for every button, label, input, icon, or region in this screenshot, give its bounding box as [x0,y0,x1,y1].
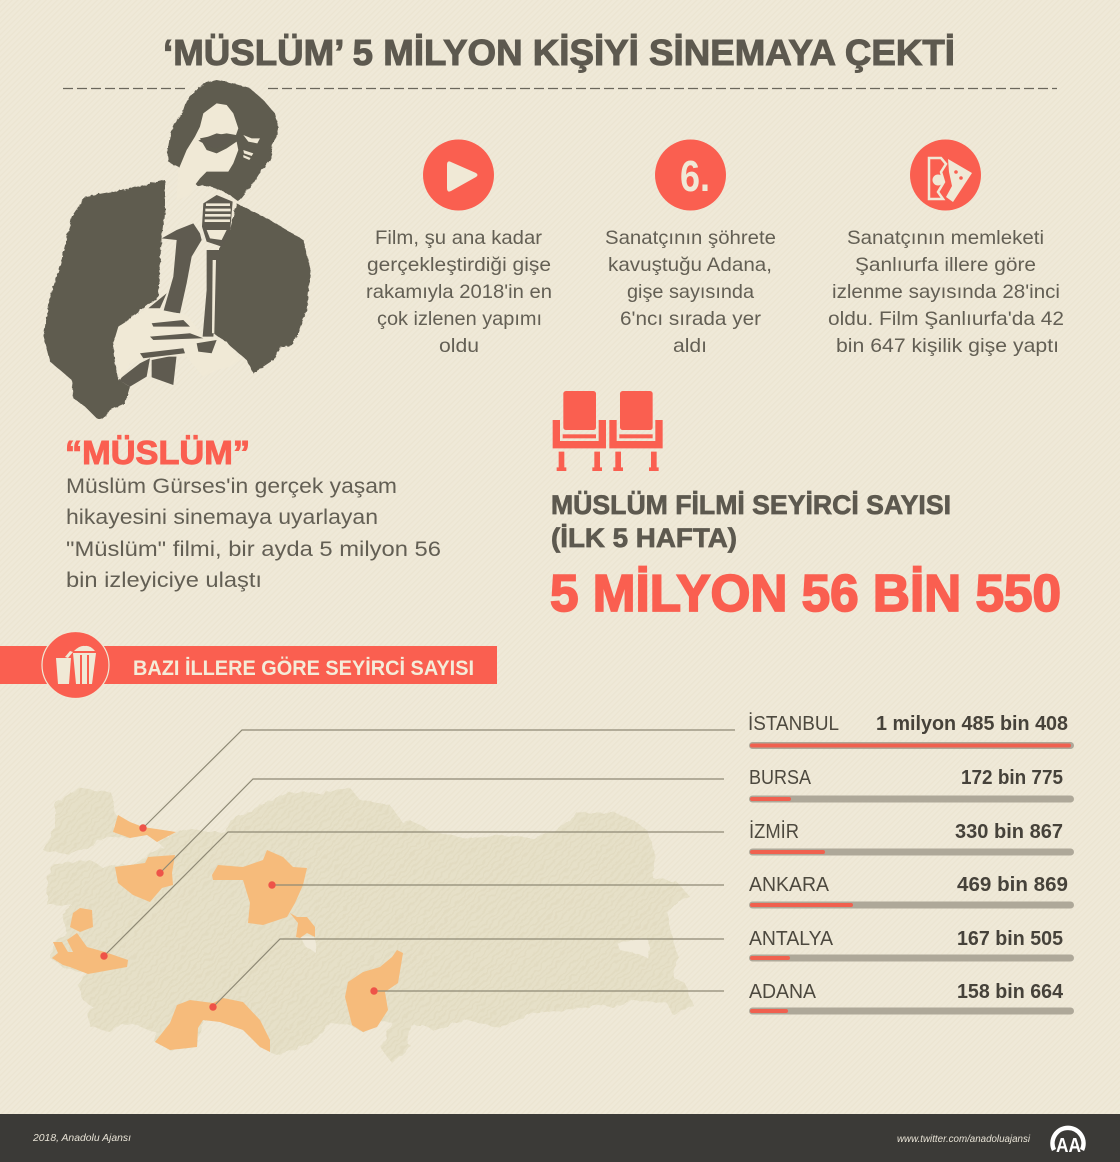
row: Antalya [749,928,1074,962]
province: Ankara [212,850,315,938]
text: most watched film of 2018: oldu [439,335,479,357]
icon: number six [655,140,726,210]
text: most watched film of 2018: Film, şu ana kadar [375,227,543,249]
province: Adana [345,950,403,1032]
text: Şanlıurfa ranks 28th: izlenme sayısında 28'inci [832,281,1060,303]
title: ‘MÜSLÜM’ 5 MİLYON KİŞİYİ SİNEMAYA ÇEKTİ [163,32,955,73]
text: Adana ranks sixth: aldı [673,335,707,357]
province: İzmir [52,908,128,974]
row: İzmir: 330 bin 867 [955,821,1063,843]
footer bar: 2018, Anadolu Ajansı [32,1132,131,1144]
text: Adana ranks sixth: 6'ncı sırada yer [620,308,762,330]
text: Şanlıurfa ranks 28th [828,227,1064,357]
row: Ankara [749,874,1074,908]
big number: total audience: 5 MİLYON 56 BİN 550 [550,565,1061,623]
footer bar [0,1114,1120,1162]
text: film description: hikayesini sinemaya uyarlayan [66,505,378,529]
text: film description [66,474,441,592]
heading: audience count label: (İLK 5 HAFTA) [551,523,737,553]
province: Antalya [155,998,270,1052]
text: Şanlıurfa ranks 28th: Sanatçının memleketi [847,227,1044,249]
text: most watched film of 2018: rakamıyla 2018'in en [366,281,552,303]
text: most watched film of 2018: gerçekleştirdiği gişe [367,254,551,276]
text: film description: Müslüm Gürses'in gerçek yaşam [66,474,397,498]
text: Şanlıurfa ranks 28th: Şanlıurfa illere göre [855,254,1036,276]
text: film description: bin izleyiciye ulaştı [66,568,262,592]
banner: audience by province: BAZI İLLERE GÖRE SEYİRCİ SAYISI [133,657,474,680]
text: most watched film of 2018: çok izlenen yapımı [377,308,542,330]
row: İstanbul: İSTANBUL [748,712,839,735]
row: Bursa [749,767,1074,802]
row: İzmir: İZMİR [749,820,799,843]
heading: audience count label: MÜSLÜM FİLMİ SEYİRCİ SAYISI [551,490,951,520]
row: İstanbul [748,712,1074,749]
text: Adana ranks sixth [605,227,776,357]
row: Adana: ADANA [749,981,817,1003]
logo: Anadolu Agency [1052,1128,1084,1157]
row: Antalya: 167 bin 505 [957,928,1063,950]
row: Adana [749,981,1074,1014]
icon: play button [423,140,494,210]
row: Ankara: ANKARA [749,874,830,896]
text: most watched film of 2018 [366,227,552,357]
icon: popcorn and drink [56,646,96,684]
text: Adana ranks sixth: Sanatçının şöhrete [605,227,776,249]
text: Adana ranks sixth: gişe sayısında [627,281,754,303]
icon: number six: 6. [680,152,710,201]
text: Adana ranks sixth: kavuştuğu Adana, [608,254,772,276]
province: İstanbul [113,815,176,842]
row: Bursa: 172 bin 775 [961,767,1063,789]
row: İzmir [749,820,1074,856]
illustration: Müslüm Gürses singing into a microphone [43,80,311,419]
row: İstanbul: 1 milyon 485 bin 408 [876,713,1068,735]
row: Ankara: 469 bin 869 [957,874,1068,896]
province: Bursa [115,855,175,902]
text: film description: "Müslüm" filmi, bir ayda 5 milyon 56 [66,537,441,561]
text: Şanlıurfa ranks 28th: oldu. Film Şanlıurfa'da 42 [828,308,1064,330]
row: Adana: 158 bin 664 [957,981,1064,1003]
face highlights [177,103,238,200]
logo: Anadolu Agency: AA [1056,1135,1081,1157]
heading: audience count label [551,490,951,553]
banner: audience by province [0,632,497,698]
icon: torn cinema ticket [910,140,981,210]
footer bar: www.twitter.com/anadoluajansi [897,1133,1031,1145]
map markers [100,824,378,1011]
row: Bursa: BURSA [749,767,812,789]
microphone head [202,195,233,247]
microphone stand [203,250,220,337]
icon: cinema seats [553,391,663,471]
leader lines from provinces to the list [104,730,735,1007]
hand [113,288,240,380]
text: Şanlıurfa ranks 28th: bin 647 kişilik gişe yaptı [836,335,1059,357]
map: Turkey [43,788,693,1063]
row: Antalya: ANTALYA [749,928,834,950]
heading: film name: “MÜSLÜM” [65,434,250,471]
